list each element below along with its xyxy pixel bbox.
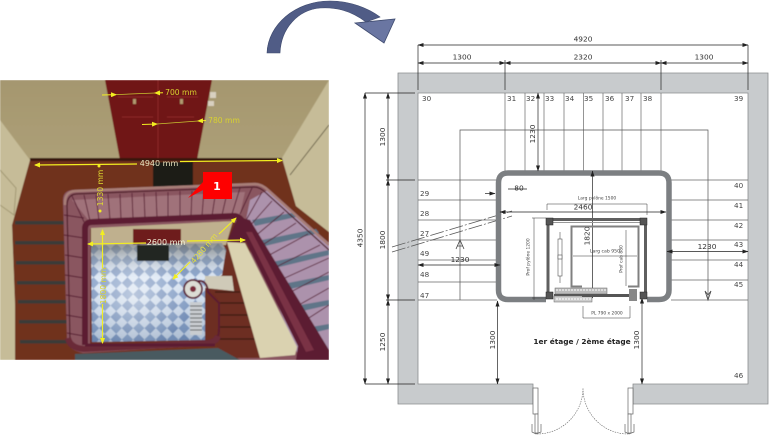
- checkered floor: [91, 243, 226, 342]
- left stairs: [14, 220, 67, 360]
- stair numbers: [420, 94, 744, 380]
- dimension: 4280 mm: 4280 mm: [189, 232, 219, 265]
- dimension labels: 1300: [632, 330, 641, 349]
- stair numbers: 33: [545, 94, 554, 103]
- lift doors: [554, 288, 637, 302]
- dimension labels: 1230: [528, 124, 537, 143]
- inner rail band: [85, 216, 243, 345]
- callout: red marker 1: 1: [213, 180, 221, 193]
- stairwell opening background: [90, 222, 251, 346]
- down arrow: [705, 291, 711, 300]
- small lift dimensions: [532, 204, 647, 318]
- spiral handrail: [184, 280, 219, 340]
- floor landing: [12, 158, 329, 360]
- stair numbers: 45: [734, 280, 743, 289]
- dimension labels: 1300: [453, 52, 472, 62]
- stair numbers: 44: [734, 260, 744, 269]
- lower mat: [137, 245, 169, 261]
- red door: [105, 80, 216, 160]
- stair numbers: 37: [625, 94, 634, 103]
- purple wedge wall: [227, 217, 329, 360]
- upper balustrade light band: [72, 192, 245, 222]
- top dimensions: [365, 45, 748, 384]
- lift cabin: [572, 226, 638, 286]
- lower landing wall: [91, 221, 233, 248]
- lift pylon structure: PL 790 x 2000: [591, 310, 623, 316]
- stair numbers: 49: [420, 249, 430, 258]
- top stair treads: [418, 93, 748, 300]
- right flight lavender: [245, 190, 329, 360]
- dimension: 2600 mm: 2600 mm: [147, 238, 185, 247]
- lift pylon structure: Larg cab 950: [590, 248, 620, 254]
- stair numbers: 30: [422, 94, 432, 103]
- lift pylon structure: Prof pylône 1200: [524, 238, 532, 276]
- top handrail: [65, 184, 329, 245]
- dimension labels: 1300: [695, 52, 714, 62]
- dimension: 4940 mm: 4940 mm: [140, 159, 178, 168]
- callout: red marker 1: [188, 172, 232, 199]
- bottom blue stairs: [75, 348, 240, 360]
- dimension labels: 1300: [488, 330, 497, 349]
- lift pylon structure: [524, 194, 647, 318]
- stair numbers: 36: [605, 94, 615, 103]
- stair numbers: 42: [734, 221, 743, 230]
- dimension: 1330 mm: 1330 mm: [96, 170, 105, 206]
- floor label: 1er étage / 2ème étage: [533, 337, 631, 346]
- dimension labels: 2320: [574, 52, 593, 62]
- balustrade ring: [63, 183, 329, 360]
- up arrow: [456, 240, 464, 249]
- stair numbers: 29: [420, 189, 430, 198]
- dimension labels: 1230: [698, 242, 717, 251]
- panel: floor plan: [356, 34, 768, 434]
- cream curved wall: [227, 242, 297, 358]
- lift shaft walls: [498, 173, 669, 300]
- dimension labels: 1250: [378, 332, 387, 351]
- guide rail: [558, 232, 562, 283]
- stair numbers: 32: [526, 94, 535, 103]
- dimension labels: [356, 34, 717, 351]
- balustrade bars: [64, 188, 329, 336]
- door mat: [153, 162, 193, 187]
- stair numbers: 35: [584, 94, 593, 103]
- right wall: [282, 80, 329, 232]
- curved arrow from photo to plan: [267, 1, 395, 53]
- dimension: 780 mm: 780 mm: [208, 116, 240, 125]
- stair numbers: 46: [734, 371, 744, 380]
- lower flight of stairs: [205, 276, 262, 358]
- dimension labels: 80: [514, 184, 524, 192]
- back wall: [0, 80, 329, 302]
- dimension: 1800 mm: 1800 mm: [99, 268, 108, 304]
- stair numbers: 39: [734, 94, 744, 103]
- dimension labels: 1300: [378, 127, 387, 146]
- dimension labels: 2460: [574, 202, 593, 212]
- walking line: [460, 130, 708, 300]
- dimension: 780 mm: [142, 116, 240, 125]
- stair numbers: 43: [734, 240, 743, 249]
- entrance double door: [532, 388, 634, 434]
- stair numbers: 47: [420, 291, 429, 300]
- stair numbers: 27: [420, 229, 429, 238]
- break lines: [392, 211, 512, 252]
- stair numbers: 34: [565, 94, 575, 103]
- dimension labels: 1230: [451, 255, 470, 264]
- stair numbers: 31: [507, 94, 516, 103]
- dimension labels: 4920: [574, 34, 593, 44]
- dimension labels: 4350: [356, 228, 364, 247]
- stair numbers: 28: [420, 209, 430, 218]
- left wall: [0, 120, 30, 360]
- dimension labels: 1820: [582, 226, 592, 245]
- stair numbers: 38: [643, 94, 653, 103]
- dimension: 700 mm: [102, 88, 197, 97]
- stair numbers: 41: [734, 201, 743, 210]
- dimension: 700 mm: 700 mm: [165, 88, 197, 97]
- dimension labels: 1800: [378, 230, 387, 249]
- panel: stairwell photo: [0, 80, 329, 360]
- stair numbers: 40: [734, 181, 744, 190]
- dimension: 1800 mm: [99, 230, 108, 343]
- lift pylon structure: Prof cab 880: [618, 245, 624, 273]
- lift pylon structure: Larg pylône 1500: [578, 194, 616, 202]
- right flight treads: [252, 213, 329, 334]
- outer walls: [398, 73, 768, 404]
- stair numbers: 48: [420, 270, 430, 279]
- dimension: 4280 mm: [173, 218, 236, 279]
